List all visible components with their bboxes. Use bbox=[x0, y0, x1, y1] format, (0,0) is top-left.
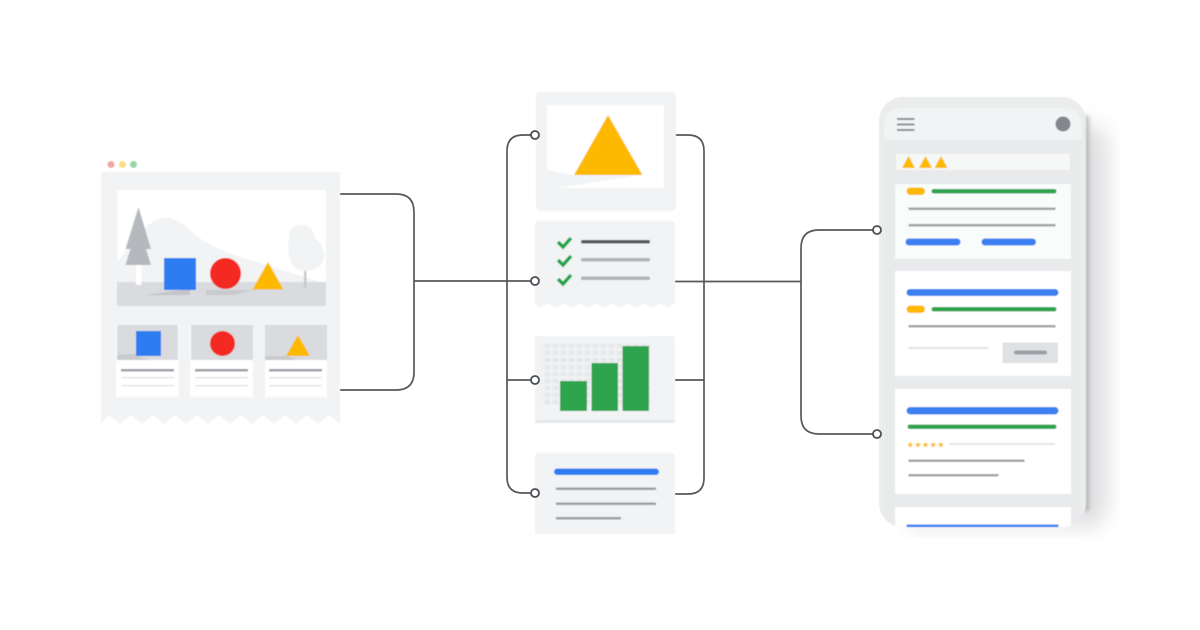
panel: phone showing responsive ads bbox=[879, 97, 1108, 532]
star rating: ★★★★★ bbox=[906, 440, 945, 450]
checklist lines bbox=[581, 240, 650, 280]
panel: image asset card bbox=[536, 92, 676, 211]
connector lines bbox=[340, 135, 877, 494]
icon: gray pine tree bbox=[126, 207, 151, 285]
icon: avatar bbox=[1056, 116, 1070, 132]
ad card 2 bbox=[895, 271, 1071, 376]
phone header bar bbox=[896, 116, 1071, 132]
icon: light round tree bbox=[288, 225, 324, 288]
logo strip with triangles bbox=[896, 154, 1070, 170]
panel: bar chart card bbox=[535, 336, 675, 423]
thumbnail card: blue square bbox=[116, 325, 179, 397]
connector end circles bbox=[531, 131, 539, 497]
icon: green check marks bbox=[558, 238, 571, 284]
phone shadow bbox=[905, 116, 1108, 532]
blue square bbox=[164, 258, 196, 290]
red circle bbox=[210, 258, 241, 289]
panel: text ad card bbox=[535, 453, 675, 534]
panel: source web page bbox=[101, 161, 340, 424]
ad card 4 cropped bbox=[895, 507, 1071, 528]
bar chart bbox=[560, 346, 649, 411]
large yellow triangle bbox=[574, 115, 642, 175]
yellow triangle bbox=[252, 262, 284, 290]
page background with torn edge bbox=[101, 172, 340, 424]
browser window dots bbox=[108, 161, 137, 168]
ad card 3 bbox=[895, 389, 1071, 494]
phone body bbox=[879, 97, 1086, 527]
thumbnail card: red circle bbox=[190, 325, 253, 397]
chart background grid bbox=[542, 343, 650, 406]
panel: checklist card bbox=[535, 221, 675, 308]
phone connector circles bbox=[873, 226, 881, 438]
hero image bbox=[117, 190, 326, 306]
phone screen bbox=[895, 116, 1071, 528]
ad card 1 bbox=[895, 184, 1071, 259]
button bbox=[1002, 342, 1058, 363]
icon: hamburger menu bbox=[897, 118, 914, 131]
thumbnail card: yellow triangle bbox=[265, 325, 327, 397]
